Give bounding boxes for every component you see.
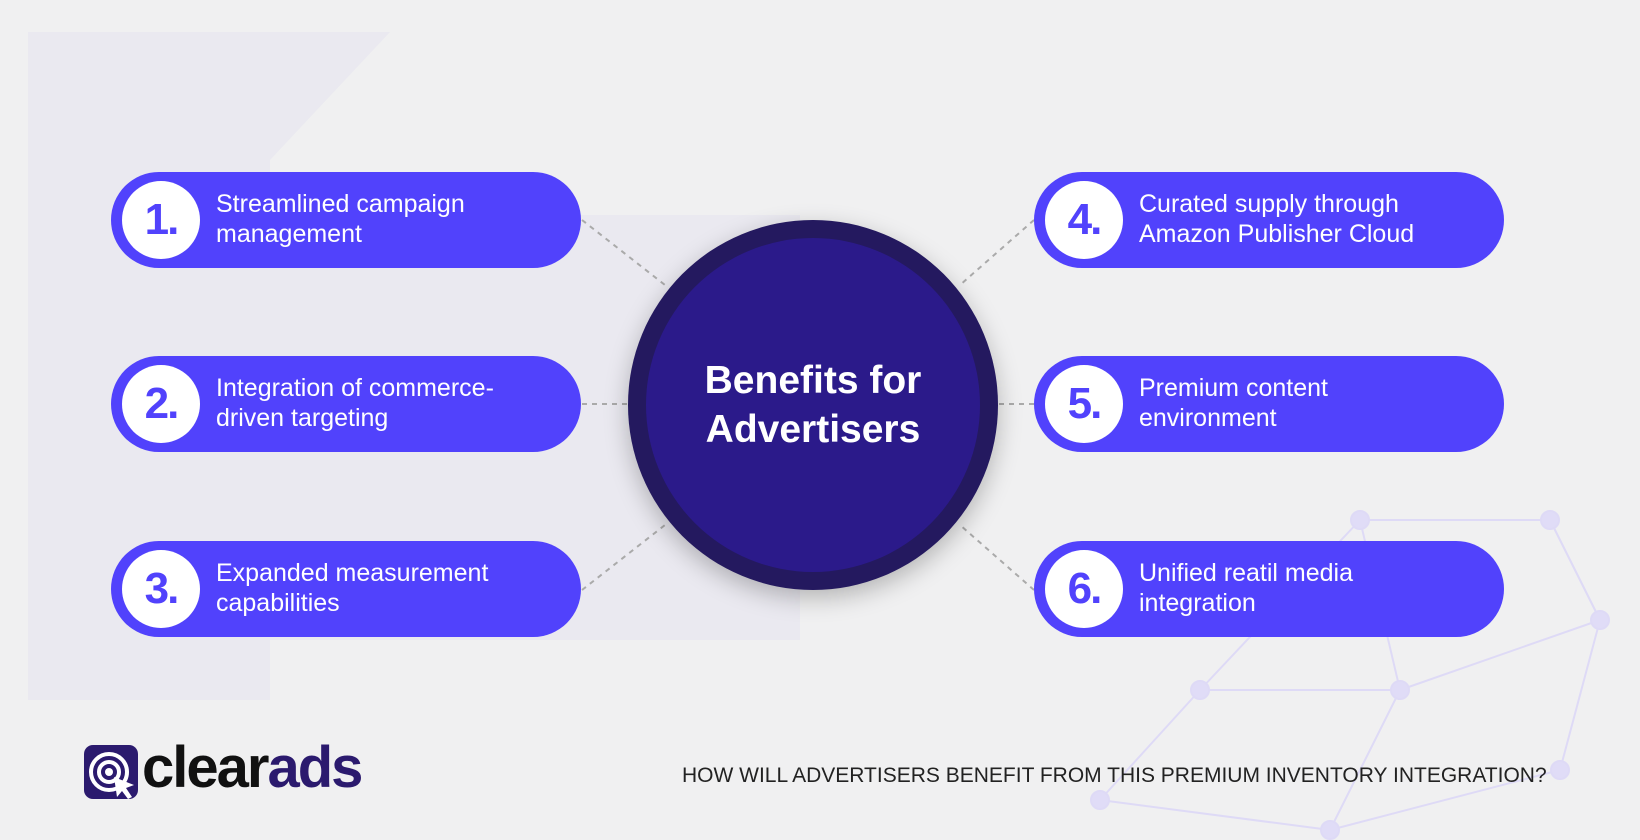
- footer question: HOW WILL ADVERTISERS BENEFIT FROM THIS PREMIUM INVENTORY INTEGRATION?: [682, 764, 1547, 787]
- pill 4: Curated supply through: [1139, 190, 1399, 218]
- pill 3: 3.: [145, 564, 177, 613]
- pill 1: management: [216, 220, 362, 248]
- center circle: Advertisers: [706, 408, 920, 451]
- center circle: Benefits for: [705, 359, 921, 402]
- pill 5: [1034, 356, 1504, 452]
- pill 6: [1034, 541, 1504, 637]
- pill 1: [111, 172, 581, 268]
- pill 2: driven targeting: [216, 404, 388, 432]
- pill 2: [111, 356, 581, 452]
- pill 3: [111, 541, 581, 637]
- logo: clearads: [142, 735, 361, 800]
- pill 1: 1.: [145, 195, 177, 244]
- pill 3: capabilities: [216, 589, 340, 617]
- pill 6: Unified reatil media: [1139, 559, 1353, 587]
- pill 6: integration: [1139, 589, 1256, 617]
- pill 2: 2.: [145, 379, 177, 428]
- pill 4: [1034, 172, 1504, 268]
- pill 2: Integration of commerce-: [216, 374, 494, 402]
- center circle: [628, 220, 998, 590]
- pill 1: Streamlined campaign: [216, 190, 465, 218]
- pill 3: Expanded measurement: [216, 559, 488, 587]
- pill 5: Premium content: [1139, 374, 1328, 402]
- pill 6: 6.: [1068, 564, 1100, 613]
- pill 5: 5.: [1068, 379, 1100, 428]
- pill 5: environment: [1139, 404, 1277, 432]
- pill 4: Amazon Publisher Cloud: [1139, 220, 1414, 248]
- pill 4: 4.: [1068, 195, 1100, 244]
